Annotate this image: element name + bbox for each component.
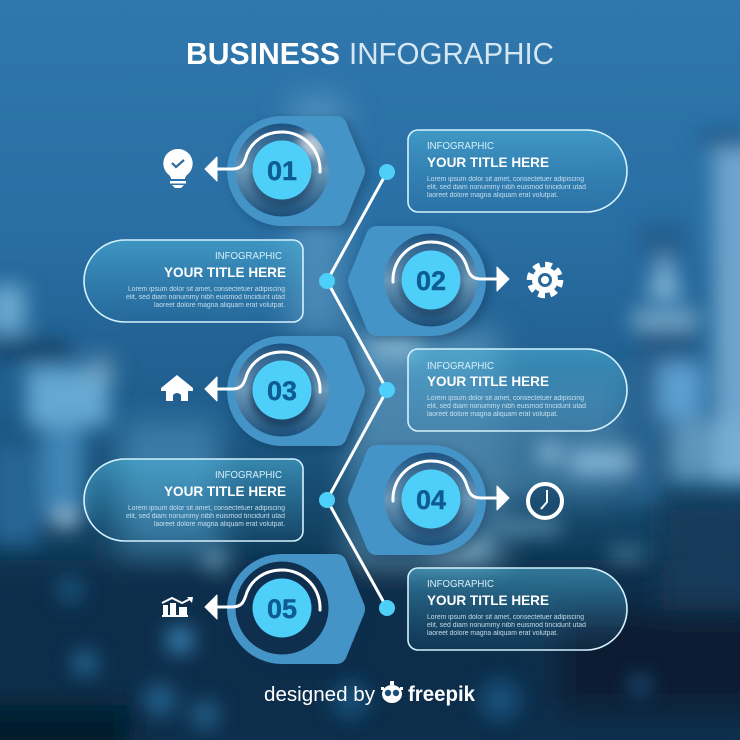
title — [186, 36, 554, 71]
step 01 badge — [205, 116, 369, 229]
panel: step 03 text: Lorem ipsum dolor sit amet, consectetuer adipiscing — [427, 395, 584, 402]
panel: step 02 text: INFOGRAPHIC — [215, 251, 282, 262]
icon: growth chart — [162, 597, 193, 617]
step 03 badge — [205, 336, 369, 449]
panel: step 03 text: elit, sed diam nonummy nibh euismod tincidunt utad — [427, 403, 586, 410]
panel: step 03 text: INFOGRAPHIC — [427, 361, 494, 372]
panel: step 05 text: Lorem ipsum dolor sit amet, consectetuer adipiscing — [427, 614, 584, 621]
panel: step 05 text: elit, sed diam nonummy nibh euismod tincidunt utad — [427, 622, 586, 629]
footer credit: freepik — [408, 683, 475, 706]
panel: step 02 text: elit, sed diam nonummy nibh euismod tincidunt utad — [126, 294, 285, 301]
panel: step 05 text: YOUR TITLE HERE — [427, 592, 549, 608]
panel: step 01 text: elit, sed diam nonummy nibh euismod tincidunt utad — [427, 184, 586, 191]
step 04 badge — [348, 445, 509, 559]
step 02 badge — [348, 226, 509, 339]
panel: step 04 text — [84, 459, 303, 541]
panel: step 05 text: INFOGRAPHIC — [427, 579, 494, 590]
panel: step 02 text: YOUR TITLE HERE — [164, 264, 286, 280]
panel: step 04 text: YOUR TITLE HERE — [164, 483, 286, 499]
panel: step 02 text: laoreet dolore magna aliquam erat volutpat. — [154, 302, 285, 309]
footer credit — [264, 681, 475, 706]
icon: gear — [530, 265, 560, 295]
panel: step 01 text: laoreet dolore magna aliquam erat volutpat. — [427, 192, 558, 199]
step 04 badge: 04 — [416, 485, 446, 515]
footer credit: designed by — [264, 684, 375, 706]
step 02 badge: 02 — [416, 266, 446, 296]
panel: step 05 text — [408, 568, 627, 650]
panel: step 01 text: INFOGRAPHIC — [427, 141, 494, 152]
title: BUSINESS — [186, 36, 340, 71]
step 03 badge: 03 — [267, 376, 297, 406]
step 05 badge — [205, 554, 369, 668]
icon: clock — [528, 484, 562, 518]
panel: step 04 text: INFOGRAPHIC — [215, 470, 282, 481]
icon: light bulb — [163, 149, 193, 188]
icon: house — [161, 375, 193, 401]
panel: step 02 text: Lorem ipsum dolor sit amet, consectetuer adipiscing — [128, 286, 285, 293]
timeline connector — [319, 164, 395, 616]
panel: step 01 text — [408, 130, 627, 212]
panel: step 04 text: Lorem ipsum dolor sit amet, consectetuer adipiscing — [128, 505, 285, 512]
panel: step 03 text — [408, 349, 627, 431]
panel: step 04 text: elit, sed diam nonummy nibh euismod tincidunt utad — [126, 513, 285, 520]
step 01 badge: 01 — [267, 156, 297, 186]
panel: step 03 text: YOUR TITLE HERE — [427, 373, 549, 389]
panel: step 03 text: laoreet dolore magna aliquam erat volutpat. — [427, 411, 558, 418]
panel: step 01 text: Lorem ipsum dolor sit amet, consectetuer adipiscing — [427, 176, 584, 183]
panel: step 05 text: laoreet dolore magna aliquam erat volutpat. — [427, 630, 558, 637]
panel: step 02 text — [84, 240, 303, 322]
title: INFOGRAPHIC — [349, 36, 554, 71]
panel: step 01 text: YOUR TITLE HERE — [427, 154, 549, 170]
panel: step 04 text: laoreet dolore magna aliquam erat volutpat. — [154, 521, 285, 528]
step 05 badge: 05 — [267, 594, 297, 624]
